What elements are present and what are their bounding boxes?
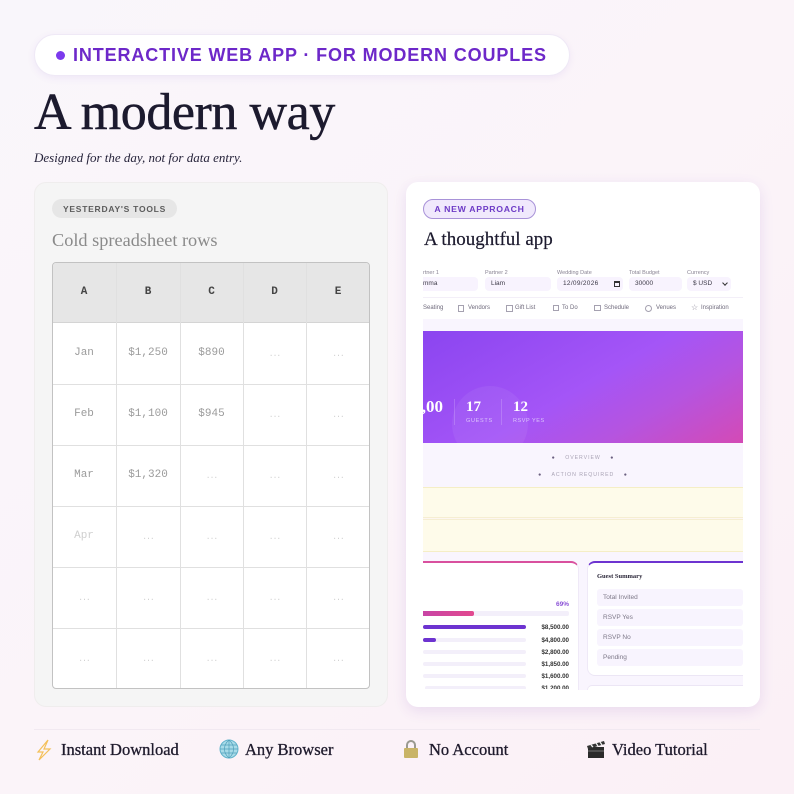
table contents: Apr [74, 530, 94, 542]
table contents: ... [206, 594, 217, 603]
navigation tabs: Inspiration [701, 305, 729, 311]
navigation tabs: Seating [423, 305, 443, 311]
table contents: ... [269, 350, 280, 359]
budget category rows: $1,600.00 [541, 673, 569, 680]
feature: instant download: Instant Download [61, 740, 179, 759]
subtitle: Designed for the day, not for data entry. [34, 150, 242, 165]
icon: padlock [404, 740, 418, 758]
table contents: ... [332, 472, 344, 481]
tinted strip [423, 319, 743, 331]
table contents: ... [269, 655, 280, 664]
feature: any browser: Any Browser [245, 740, 333, 759]
table contents: ... [206, 472, 217, 481]
budget progress bar [423, 611, 569, 616]
guest summary rows: Total Invited [603, 594, 638, 601]
navigation tabs: Vendors [468, 305, 490, 311]
table contents: ... [269, 472, 280, 481]
tag: yesterday's tools [52, 199, 177, 218]
table contents: D [271, 286, 278, 298]
table contents: ... [142, 594, 154, 603]
navigation tabs: To Do [562, 305, 578, 311]
stat: guests: 17 [466, 399, 481, 415]
wedding form fields: mma [423, 280, 437, 287]
wedding form fields: $ USD [693, 280, 712, 287]
hero circle [452, 386, 528, 462]
table contents: ... [332, 655, 344, 664]
icon: globe [220, 740, 238, 758]
footer divider [34, 729, 760, 730]
table contents: E [335, 286, 341, 298]
table contents: ... [332, 533, 344, 542]
budget category rows: $8,500.00 [541, 624, 569, 631]
table contents: A [81, 286, 87, 298]
table contents: $1,320 [128, 469, 168, 481]
guest summary rows [597, 589, 743, 666]
panel: yesterday's tools [34, 182, 388, 707]
table contents: $1,250 [128, 347, 168, 359]
table contents: Jan [74, 347, 94, 359]
wedding form fields: Currency [687, 270, 709, 276]
navigation tabs: Venues [656, 305, 676, 311]
table contents: C [208, 286, 215, 298]
table contents: ... [78, 655, 90, 664]
heading: cold spreadsheet rows: Cold spreadsheet rows [52, 230, 218, 250]
section label: overview: ● OVERVIEW ● [552, 455, 614, 461]
stat: rsvp yes: 12 [513, 399, 528, 415]
icon: lightning [36, 740, 52, 760]
feature: video tutorial: Video Tutorial [612, 740, 708, 759]
wedding form fields: Total Budget [629, 270, 660, 276]
wedding form fields: Partner 2 [485, 270, 508, 276]
table contents: ... [332, 411, 344, 420]
table contents: ... [332, 350, 344, 359]
budget category rows: $4,800.00 [541, 636, 569, 644]
budget percent: 69% [556, 601, 569, 608]
table contents: ... [269, 533, 280, 542]
table contents: ... [269, 411, 280, 420]
table contents: ... [142, 655, 154, 664]
navigation tabs: ☆ [691, 303, 698, 312]
wedding form fields: Liam [491, 280, 505, 287]
budget category rows: $1,850.00 [541, 661, 569, 668]
table contents: Mar [74, 469, 94, 481]
guest summary heading: Guest Summary [597, 573, 642, 580]
budget category rows [423, 624, 569, 689]
feature: no account: No Account [429, 740, 508, 759]
table contents: ... [142, 533, 154, 542]
main title: A modern way [34, 84, 335, 141]
stat: guests: GUESTS [466, 418, 493, 424]
table contents: ... [78, 594, 90, 603]
next card top edge [587, 685, 743, 690]
budget category rows: $2,800.00 [541, 649, 569, 656]
top pill badge [34, 34, 570, 76]
wedding form fields: rtner 1 [423, 270, 439, 276]
pill dot [56, 51, 65, 60]
guest summary rows: RSVP No [603, 634, 631, 641]
heading: a thoughtful app: A thoughtful app [424, 229, 553, 250]
lavender dashboard background [423, 443, 743, 690]
navigation tabs: Gift List [515, 305, 535, 311]
table contents: $1,100 [128, 408, 168, 420]
table contents: B [145, 286, 151, 298]
navigation tabs [423, 303, 729, 312]
stat: rsvp yes: RSVP YES [513, 418, 545, 424]
wedding form fields: Wedding Date [557, 270, 592, 276]
icon: clapperboard [587, 741, 605, 758]
table contents: ... [332, 594, 344, 603]
card: guest summary [587, 561, 743, 676]
tag: a new approach: A NEW APPROACH [434, 204, 525, 214]
card: budget [423, 561, 579, 690]
table contents: $945 [198, 408, 225, 420]
stat: rsvp yes [513, 399, 545, 424]
guest summary rows: RSVP Yes [603, 614, 633, 621]
tag: yesterday's tools: YESTERDAY'S TOOLS [63, 204, 166, 214]
stat: guests [466, 399, 493, 424]
table contents: Feb [74, 408, 94, 420]
action alerts [423, 487, 743, 552]
wedding form fields: 30000 [635, 280, 653, 287]
hero banner [423, 331, 743, 443]
navigation tabs: Schedule [604, 305, 629, 311]
table contents: $890 [198, 347, 225, 359]
panel: a new approach [406, 182, 760, 707]
table contents: ... [206, 533, 217, 542]
wedding form fields [423, 270, 743, 298]
section label: action required: ● ACTION REQUIRED ● [538, 472, 628, 478]
tag: a new approach [423, 199, 536, 219]
pill text: INTERACTIVE WEB APP · FOR MODERN COUPLES [73, 45, 547, 65]
guest summary rows: Pending [603, 654, 627, 661]
table contents: ... [206, 655, 217, 664]
table contents: ... [269, 594, 280, 603]
spreadsheet table [52, 262, 370, 689]
wedding form fields: 12/09/2026 [563, 280, 599, 287]
